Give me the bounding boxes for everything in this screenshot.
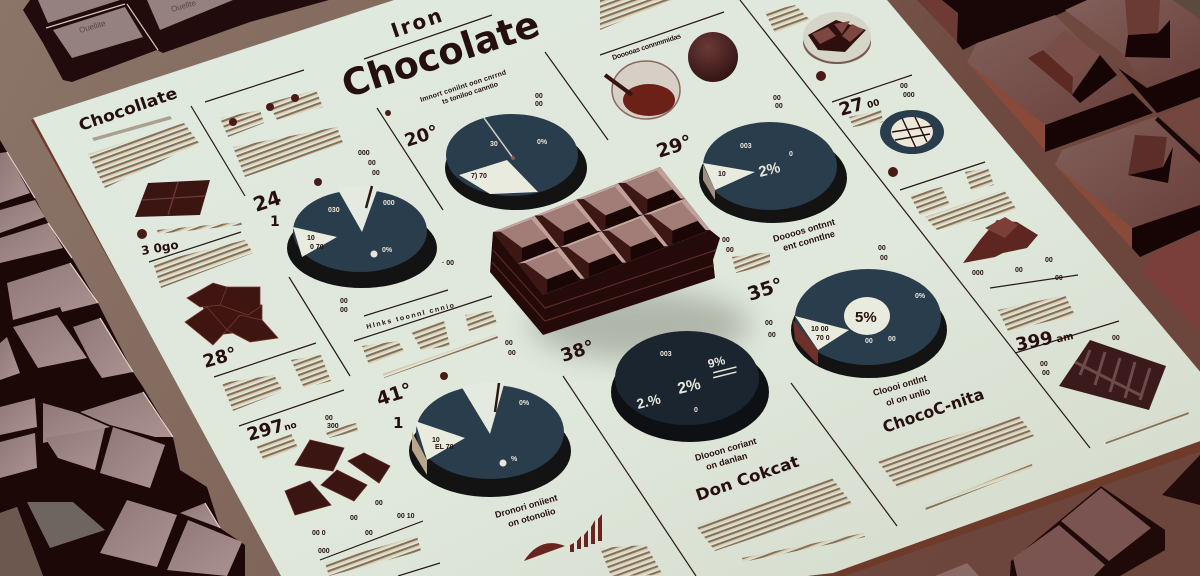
captions: Cloooi ontlnt: [872, 373, 928, 398]
captions: Doooos ontnnt: [772, 217, 836, 244]
small data labels: 00: [375, 500, 383, 507]
text block: Chocolate intro: [76, 83, 199, 188]
pie chart 35: [745, 269, 947, 378]
small data labels: 00: [508, 350, 516, 357]
pie chart 20: [402, 114, 587, 210]
small data labels: 00: [765, 320, 773, 327]
small data labels: 00: [325, 415, 333, 422]
icon: chocolate bar bottom right: [1059, 340, 1166, 410]
small data labels: 00: [365, 530, 373, 537]
pie chart 20: 30: [490, 141, 498, 148]
pie chart 24: 0%: [382, 247, 393, 254]
captions: Dronori oniient: [494, 493, 559, 520]
pie chart 38: 0: [694, 407, 698, 414]
pie chart 24: 24: [250, 185, 284, 217]
pie chart 24: 10: [307, 235, 315, 242]
small data labels: 000: [358, 150, 370, 157]
pie chart 38: 9%: [706, 353, 727, 371]
pie chart 41: 0%: [519, 400, 530, 407]
small data labels: 00: [535, 101, 543, 108]
small data labels: 00: [775, 103, 783, 110]
small data labels: [312, 83, 1120, 555]
icon: cocoa bowl: [605, 61, 680, 119]
small data labels: 00 0: [312, 530, 326, 537]
chocolate pile: left side: [0, 140, 245, 576]
pie chart 35: 10 00: [811, 326, 829, 333]
pie chart 38: 2.%: [635, 390, 663, 412]
pie chart 38: 003: [660, 351, 672, 358]
captions: Imnort conilnt oon cnrrnd: [419, 69, 507, 104]
pie chart 38: 38°: [558, 336, 597, 367]
pie chart 20: 20°: [402, 121, 441, 152]
pie chart 41: 1: [393, 414, 403, 432]
stat labels: 27 00: [837, 89, 882, 121]
pie chart 29: 29°: [654, 131, 695, 163]
pie chart 41: EL 70: [435, 444, 454, 451]
text block: Chocolate intro: Chocollate: [76, 83, 180, 135]
title: Chocolate: [336, 2, 545, 107]
captions: ts toniloo canntio: [441, 81, 499, 106]
captions: Dooooas connmmidas: [611, 33, 682, 62]
pie chart 20: 0%: [537, 139, 548, 146]
small data labels: 00: [726, 247, 734, 254]
stat labels: 399 am: [1014, 323, 1075, 356]
pie chart 41: [374, 379, 571, 497]
small data labels: 00: [1055, 275, 1063, 282]
icon: chocolate chunk: [963, 217, 1038, 263]
icon: truffle: [688, 32, 738, 82]
icon: chocolate stack left: [185, 283, 278, 345]
pie chart 29: 2%: [757, 159, 782, 181]
captions: Dlooon coriant: [694, 436, 758, 463]
heading: ChocoC-nita: ChocoC-nita: [880, 384, 987, 437]
small data labels: 300: [327, 423, 339, 430]
chocolate blocks: bottom right: [935, 455, 1200, 576]
small data labels: 00: [1040, 361, 1048, 368]
captions: ol on unlio: [885, 386, 932, 408]
small data labels: 00: [722, 237, 730, 244]
small data labels: 000: [972, 270, 984, 277]
pie chart 29: 10: [718, 171, 726, 178]
pie chart 29: 003: [740, 143, 752, 150]
small data labels: 00: [350, 515, 358, 522]
icon: chocolate squares: [285, 440, 390, 515]
small data labels: 00: [900, 83, 908, 90]
centre chocolate bar: [490, 167, 720, 335]
icon: chocolate dish: [803, 12, 871, 64]
pie chart 35: 00: [888, 336, 896, 343]
pie chart 24: 0 70: [310, 244, 324, 251]
captions: on otonolio: [507, 506, 557, 529]
title: Iron: [388, 3, 445, 43]
chocolate blocks: right side: [917, 0, 1200, 333]
small data labels: 00: [1042, 370, 1050, 377]
pie chart 35: 00: [865, 338, 873, 345]
heading: Don Cokcat: Don Cokcat: [693, 452, 802, 505]
pie chart 29: 0: [789, 151, 793, 158]
small data labels: 00: [340, 298, 348, 305]
captions: Hlnks toonnl cnnio: [366, 302, 455, 331]
small data labels: 000: [903, 92, 915, 99]
pie chart 38: [558, 331, 769, 442]
small data labels: 00: [878, 245, 886, 252]
pie chart 35: 35°: [745, 274, 786, 306]
stat labels: [140, 89, 1075, 446]
small bullet icons: [137, 71, 898, 380]
small data labels: 00: [1112, 335, 1120, 342]
pie chart 24: 000: [383, 200, 395, 207]
shadow beneath centre bar: [530, 290, 750, 360]
pie chart 24: [250, 185, 437, 288]
small data labels: 00: [340, 307, 348, 314]
small data labels: 00: [535, 93, 543, 100]
chocolate pile: top left: Ouellite: [78, 19, 107, 35]
mini chart: dome and bars: [524, 514, 602, 561]
small data labels: 00: [1045, 257, 1053, 264]
icon: globe: [880, 110, 944, 154]
pie chart 41: %: [511, 456, 518, 463]
pie chart 41: 10: [432, 437, 440, 444]
pie chart 35: 70 0: [816, 335, 830, 342]
small data labels: 00: [768, 332, 776, 339]
pie chart 20: 7) 70: [471, 173, 487, 180]
pie chart 35: 0%: [915, 293, 926, 300]
pie chart 41: 41°: [374, 379, 415, 411]
small data labels: · 00: [442, 260, 454, 267]
small data labels: 000: [318, 548, 330, 555]
stat labels: 297no: [245, 412, 299, 446]
pie chart 24: 1: [270, 214, 280, 230]
pie chart 24: 030: [328, 207, 340, 214]
small data labels: 00: [1015, 267, 1023, 274]
small data labels: 00: [505, 340, 513, 347]
small data labels: 00 10: [397, 513, 415, 520]
stat labels: 3 0go: [140, 238, 180, 258]
icon: chocolate bar tile: [135, 180, 210, 217]
small data labels: 00: [880, 255, 888, 262]
pie chart 35: 5%: [855, 309, 877, 326]
pie chart 29: [654, 122, 847, 223]
small data labels: 00: [368, 160, 376, 167]
stat labels: 28°: [201, 343, 239, 373]
pie chart 38: 2%: [676, 376, 702, 398]
small data labels: 00: [372, 170, 380, 177]
captions: [366, 33, 932, 529]
captions: on danlan: [705, 451, 748, 472]
chocolate pile: top left: [23, 0, 329, 82]
small data labels: 00: [773, 95, 781, 102]
captions: ent conntlne: [782, 229, 836, 253]
